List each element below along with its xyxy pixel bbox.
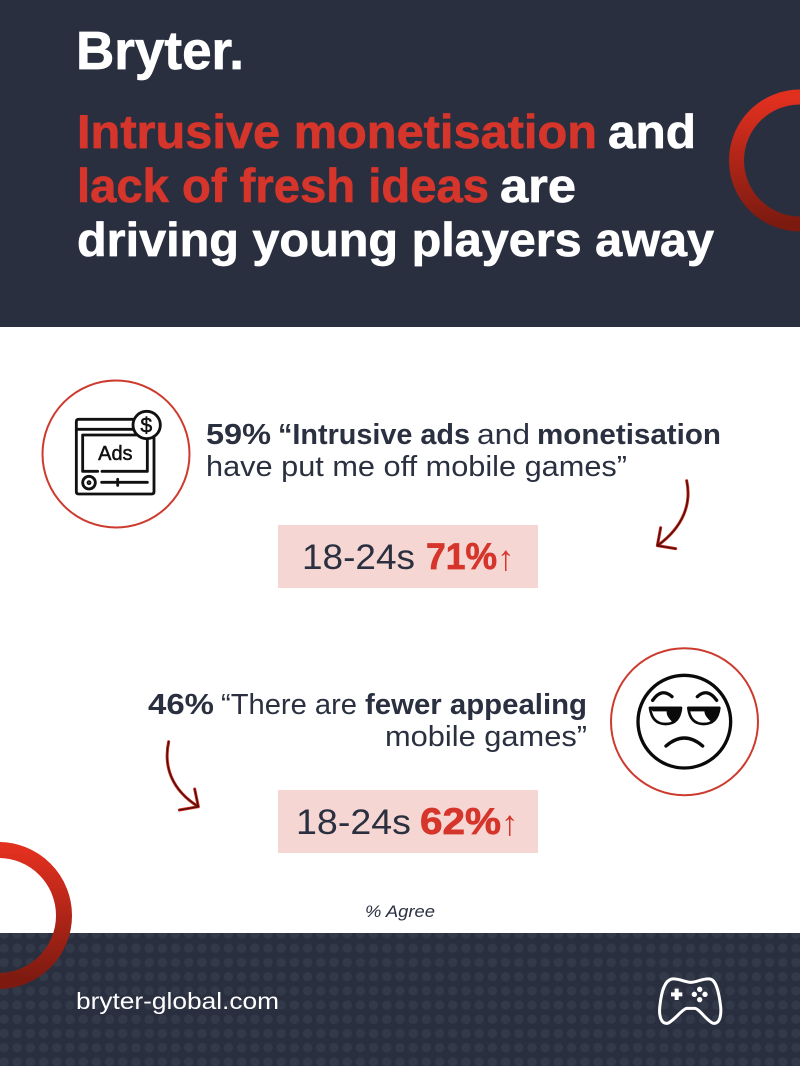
stat box: 18-24s 71%: 18-24s xyxy=(302,538,415,577)
text: fewer appealing statement xyxy=(148,689,587,753)
text: intrusive ads statement: 59% xyxy=(206,419,271,451)
logo: Bryter: Bryter. xyxy=(76,21,244,81)
text: intrusive ads statement xyxy=(206,419,721,483)
icon: ads in circle: $ xyxy=(140,413,152,437)
text: intrusive ads statement: monetisation xyxy=(537,419,721,451)
stat box: 18-24s 62% xyxy=(278,790,538,853)
title xyxy=(77,105,714,266)
stat box: 18-24s 62%: 18-24s xyxy=(296,803,411,842)
footer url: bryter-global.com xyxy=(76,988,279,1014)
text: fewer appealing statement: fewer appealing xyxy=(365,689,587,721)
title: driving young players away xyxy=(77,213,714,266)
title: lack of fresh ideas xyxy=(77,159,489,212)
text: fewer appealing statement: “There are xyxy=(221,689,357,721)
stat box: 18-24s 71% xyxy=(278,525,538,588)
icon: unamused face in circle xyxy=(611,648,758,795)
arrow: second statement to stat xyxy=(167,742,198,810)
title: and xyxy=(608,105,696,158)
title: are xyxy=(500,159,576,212)
stat box: 18-24s 71%: ↑ xyxy=(497,539,514,578)
panel: footer background xyxy=(0,933,800,1066)
icon: ads in circle xyxy=(42,380,190,528)
text: intrusive ads statement: “Intrusive ads xyxy=(278,419,470,451)
text: fewer appealing statement: 46% xyxy=(148,689,214,721)
panel: header background xyxy=(0,0,800,327)
title: Intrusive monetisation xyxy=(77,105,597,158)
text: intrusive ads statement: have put me off mobile games” xyxy=(206,451,627,483)
icon: game controller xyxy=(660,979,721,1023)
decorative ring: bottom left xyxy=(0,850,64,981)
decorative ring: top right xyxy=(736,97,800,224)
text: fewer appealing statement: mobile games” xyxy=(385,721,587,753)
icon: ads in circle: Ads xyxy=(98,443,133,465)
stat box: 18-24s 62%: 62% xyxy=(420,801,501,842)
stat box: 18-24s 62%: ↑ xyxy=(501,804,518,843)
text: intrusive ads statement: and xyxy=(477,419,530,451)
stat box: 18-24s 71%: 71% xyxy=(426,536,497,577)
note: % Agree: % Agree xyxy=(365,903,435,921)
arrow: first statement to stat xyxy=(657,481,688,549)
